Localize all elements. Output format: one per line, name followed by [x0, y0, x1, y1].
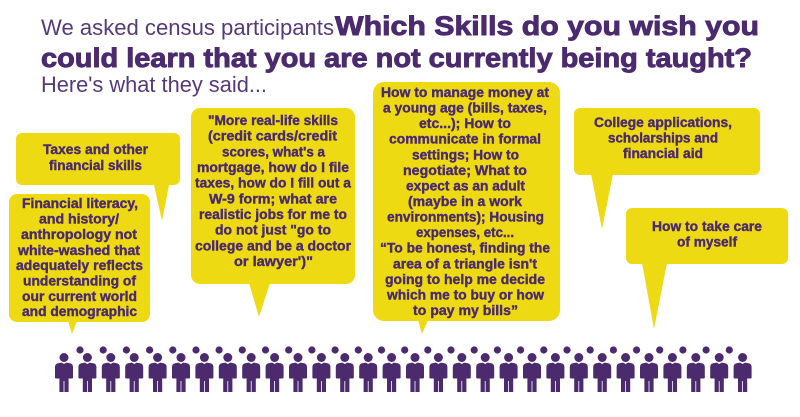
speech bubble: managing money: How to manage money at [381, 85, 549, 100]
speech bubble: managing money: to pay my bills” [413, 303, 518, 318]
title: Which Skills do you wish you [335, 11, 759, 41]
title: We asked census participants [41, 15, 334, 40]
speech bubble: take care of myself [626, 208, 788, 329]
speech bubble: real-life skills: mortgage, how do I file [197, 160, 349, 175]
speech bubble: real-life skills: realistic jobs for me to [199, 207, 347, 222]
speech bubble: managing money: communicate in formal [389, 132, 541, 147]
speech bubble: real-life skills: college and be a doctor [195, 238, 352, 253]
speech bubble: financial literacy: anthropology not [21, 227, 137, 242]
speech bubble: financial literacy: Financial literacy, [22, 196, 138, 211]
speech bubble: managing money: expect as an adult [406, 178, 525, 193]
speech bubble: taxes: Taxes and other [43, 142, 149, 157]
speech bubble: financial literacy: adequately reflects [16, 258, 143, 273]
speech bubble: financial literacy: white-washed that [17, 243, 140, 258]
speech bubble: financial literacy: and demographic [22, 304, 137, 319]
speech bubble: take care of myself: of myself [677, 234, 737, 250]
speech bubble: financial literacy: and history/ [39, 212, 119, 226]
speech bubble: managing money: a young age (bills, taxes, [383, 101, 547, 116]
speech bubble: managing money: (maybe in a work [408, 194, 522, 209]
speech bubble: college applications: financial aid [623, 146, 703, 161]
speech bubble: real-life skills: (credit cards/credit [208, 129, 337, 144]
speech bubble: managing money: settings; How to [412, 147, 519, 162]
speech bubble: managing money: environments); Housing [387, 210, 544, 225]
speech bubble: college applications: College applications, [594, 115, 732, 130]
speech bubble: real-life skills: "More real-life skills [208, 113, 338, 128]
speech bubble: real-life skills [191, 108, 355, 317]
title: could learn that you are not currently being taught? [41, 43, 752, 73]
speech bubble: real-life skills: or lawyer')" [234, 254, 313, 269]
speech bubble: real-life skills: do not just "go to [215, 223, 331, 238]
speech bubble: college applications: scholarships and [608, 130, 718, 146]
speech bubble: managing money: “To be honest, finding the [380, 241, 550, 256]
speech bubble: real-life skills: scores, what's a [222, 144, 325, 159]
title: Here's what they said... [41, 72, 267, 97]
speech bubble: managing money: area of a triangle isn't [393, 256, 537, 271]
speech bubble: financial literacy: understanding of [23, 274, 136, 288]
speech bubble: managing money: which me to buy or how [386, 287, 544, 302]
speech bubble: real-life skills: W-9 form; what are [209, 191, 337, 206]
speech bubble: financial literacy: our current world [22, 289, 137, 304]
speech bubble: real-life skills: taxes, how do I fill out a [195, 176, 351, 191]
speech bubble: taxes: financial skills [49, 158, 142, 173]
title [41, 11, 759, 97]
speech bubble: take care of myself: How to take care [652, 219, 762, 234]
speech bubble: taxes [16, 133, 180, 221]
speech bubble: college applications [574, 108, 760, 229]
crowd of people icons [55, 346, 752, 392]
speech bubble: managing money: etc...); How to [419, 116, 511, 131]
speech bubble: managing money: negotiate; What to [403, 163, 527, 178]
speech bubble: managing money [373, 82, 560, 334]
speech bubble: managing money: expenses, etc... [416, 225, 514, 240]
speech bubble: financial literacy [9, 194, 150, 334]
speech bubble: managing money: going to help me decide [385, 272, 545, 287]
